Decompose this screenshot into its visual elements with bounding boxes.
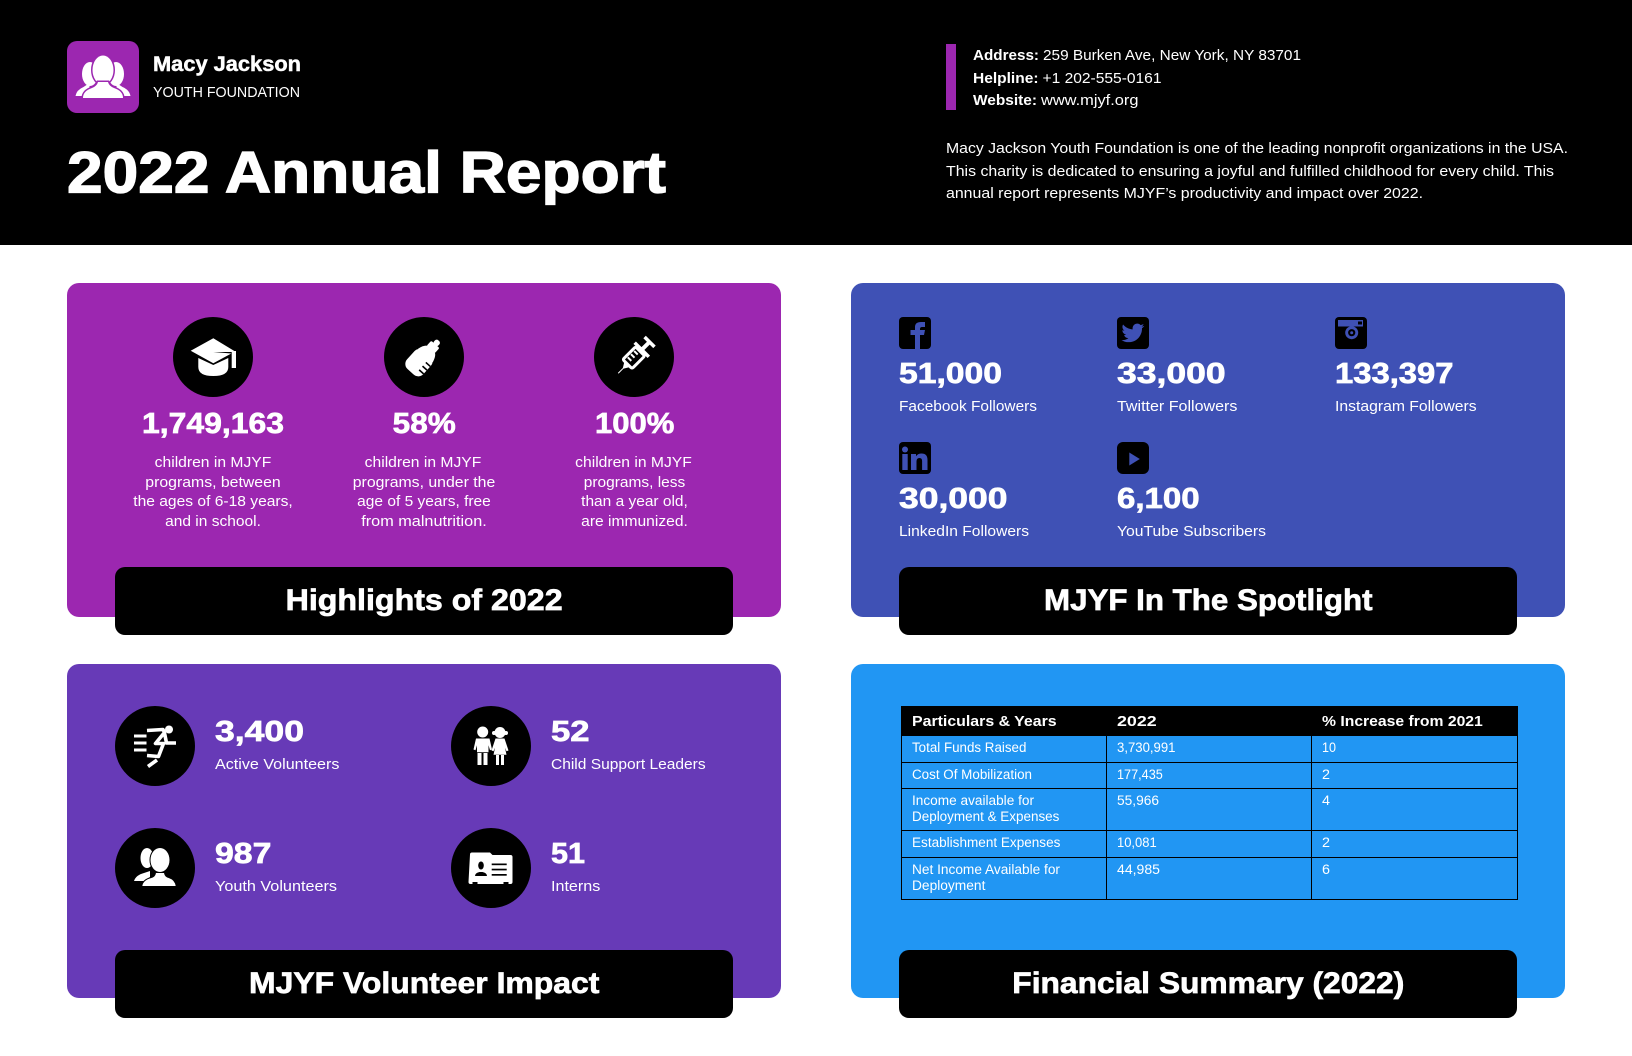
stat: 100% (575, 408, 692, 530)
financial table (901, 706, 1518, 900)
table body rows: 177,435 (1117, 767, 1163, 782)
icon: twitter (1117, 317, 1149, 349)
heading ribbon: financial summary (899, 950, 1517, 1018)
table header row: Particulars & Years (912, 713, 1057, 730)
stat: 1,749,163 (133, 408, 293, 530)
stat: 58%: programs, under the (353, 474, 495, 491)
table header row: % Increase from 2021 (1322, 713, 1483, 730)
panel: volunteer impact (67, 664, 781, 1018)
heading ribbon: volunteer impact (115, 950, 733, 1018)
icon: instagram (1335, 317, 1367, 349)
stat: twitter followers (1117, 358, 1237, 415)
table body rows: Deployment & Expenses (912, 809, 1060, 824)
header band (0, 0, 1632, 245)
table body rows: 10 (1322, 740, 1336, 755)
icon: runner (115, 706, 195, 786)
stat: linkedin followers: 30,000 (899, 483, 1008, 515)
stat: 58%: from malnutrition. (361, 513, 487, 530)
heading ribbon: highlights (115, 567, 733, 635)
table body rows: 2 (1322, 835, 1330, 850)
foundation description: Macy Jackson Youth Foundation is one of the leading nonprofit organizations in the USA. (946, 140, 1568, 157)
stat: interns: Interns (551, 878, 600, 895)
table body rows: 44,985 (1117, 862, 1160, 877)
icon: linkedin (899, 442, 931, 474)
panel: financial summary (851, 664, 1565, 1018)
stat: active volunteers (215, 716, 339, 773)
stat: 1,749,163: the ages of 6-18 years, (133, 493, 293, 510)
stat: 58% (353, 408, 495, 530)
stat: active volunteers: 3,400 (215, 716, 304, 748)
stat: 1,749,163: and in school. (165, 513, 261, 530)
contact details: Website: (973, 92, 1037, 109)
stat: interns: 51 (551, 838, 585, 870)
stat: linkedin followers: LinkedIn Followers (899, 523, 1029, 540)
stat: 1,749,163: programs, between (145, 474, 281, 491)
organisation name (153, 53, 301, 101)
contact details: Helpline: (973, 70, 1038, 87)
table body rows: Income available for (912, 793, 1034, 808)
contact details (973, 47, 1301, 109)
table body rows: 3,730,991 (1117, 740, 1176, 755)
table header row (912, 713, 1483, 730)
table body rows: Net Income Available for (912, 862, 1060, 877)
table body rows (912, 740, 1336, 893)
stat: instagram followers: Instagram Followers (1335, 398, 1477, 415)
stat: youtube subscribers: YouTube Subscribers (1117, 523, 1266, 540)
stat: 1,749,163: children in MJYF (155, 454, 271, 471)
logo: three people (67, 41, 139, 113)
table header row: 2022 (1117, 713, 1157, 730)
contact accent bar (946, 44, 956, 110)
stat: 58%: age of 5 years, free (357, 493, 491, 510)
title: 2022 Annual Report (67, 140, 666, 206)
stat: 100%: are immunized. (581, 513, 688, 530)
foundation description: annual report represents MJYF’s productivity and impact over 2022. (946, 185, 1423, 202)
stat: linkedin followers (899, 483, 1029, 540)
contact details: +1 202-555-0161 (1042, 70, 1162, 87)
stat: facebook followers (899, 358, 1037, 415)
stat: youtube subscribers (1117, 483, 1266, 540)
stat: 58%: 58% (393, 408, 456, 440)
stat: facebook followers: Facebook Followers (899, 398, 1037, 415)
table body rows: 10,081 (1117, 835, 1157, 850)
contact details: Address: (973, 47, 1039, 64)
heading ribbon: volunteer impact: MJYF Volunteer Impact (249, 967, 599, 1000)
organisation name: Macy Jackson (153, 53, 301, 76)
heading ribbon: spotlight (899, 567, 1517, 635)
stat: instagram followers: 133,397 (1335, 358, 1454, 390)
stat: twitter followers: 33,000 (1117, 358, 1226, 390)
table body rows: 4 (1322, 793, 1331, 808)
stat: instagram followers (1335, 358, 1477, 415)
stat: 100%: 100% (595, 408, 675, 440)
stat: 100%: children in MJYF (575, 454, 692, 471)
icon: facebook (899, 317, 931, 349)
table body rows: Total Funds Raised (912, 740, 1026, 755)
table body rows: 2 (1322, 767, 1330, 782)
heading ribbon: highlights: Highlights of 2022 (286, 584, 563, 617)
stat: 58%: children in MJYF (365, 454, 481, 471)
table body rows: 55,966 (1117, 793, 1159, 808)
panel: highlights of 2022 (67, 283, 781, 635)
heading ribbon: spotlight: MJYF In The Spotlight (1044, 584, 1372, 617)
stat: youth volunteers: 987 (215, 838, 271, 870)
table body rows: 6 (1322, 862, 1330, 877)
stat: active volunteers: Active Volunteers (215, 756, 339, 773)
icon: two children (451, 706, 531, 786)
table body rows: Cost Of Mobilization (912, 767, 1032, 782)
icon: syringe (594, 317, 674, 397)
stat: youth volunteers (215, 838, 337, 895)
table body rows: Establishment Expenses (912, 835, 1061, 850)
stat: 100%: than a year old, (581, 493, 688, 510)
icon: id card (451, 828, 531, 908)
contact details: www.mjyf.org (1040, 92, 1138, 109)
stat: child support leaders: 52 (551, 716, 590, 748)
stat: child support leaders (551, 716, 706, 773)
foundation description: This charity is dedicated to ensuring a joyful and fulfilled childhood for every child. This (946, 163, 1554, 180)
foundation description (946, 140, 1568, 202)
panel: MJYF in the spotlight (851, 283, 1565, 635)
contact details: 259 Burken Ave, New York, NY 83701 (1043, 47, 1301, 64)
organisation name: YOUTH FOUNDATION (153, 84, 300, 101)
stat: youth volunteers: Youth Volunteers (215, 878, 337, 895)
icon: baby bottle (384, 317, 464, 397)
table body rows: Deployment (912, 878, 986, 893)
stat: child support leaders: Child Support Leaders (551, 756, 706, 773)
stat: youtube subscribers: 6,100 (1117, 483, 1200, 515)
stat: 1,749,163: 1,749,163 (142, 408, 284, 440)
icon: graduation cap (173, 317, 253, 397)
stat: 100%: programs, less (584, 474, 685, 491)
stat: facebook followers: 51,000 (899, 358, 1002, 390)
stat: twitter followers: Twitter Followers (1117, 398, 1237, 415)
icon: youtube (1117, 442, 1149, 474)
heading ribbon: financial summary: Financial Summary (2022) (1012, 967, 1404, 1000)
icon: two people (115, 828, 195, 908)
stat: interns (551, 838, 600, 895)
